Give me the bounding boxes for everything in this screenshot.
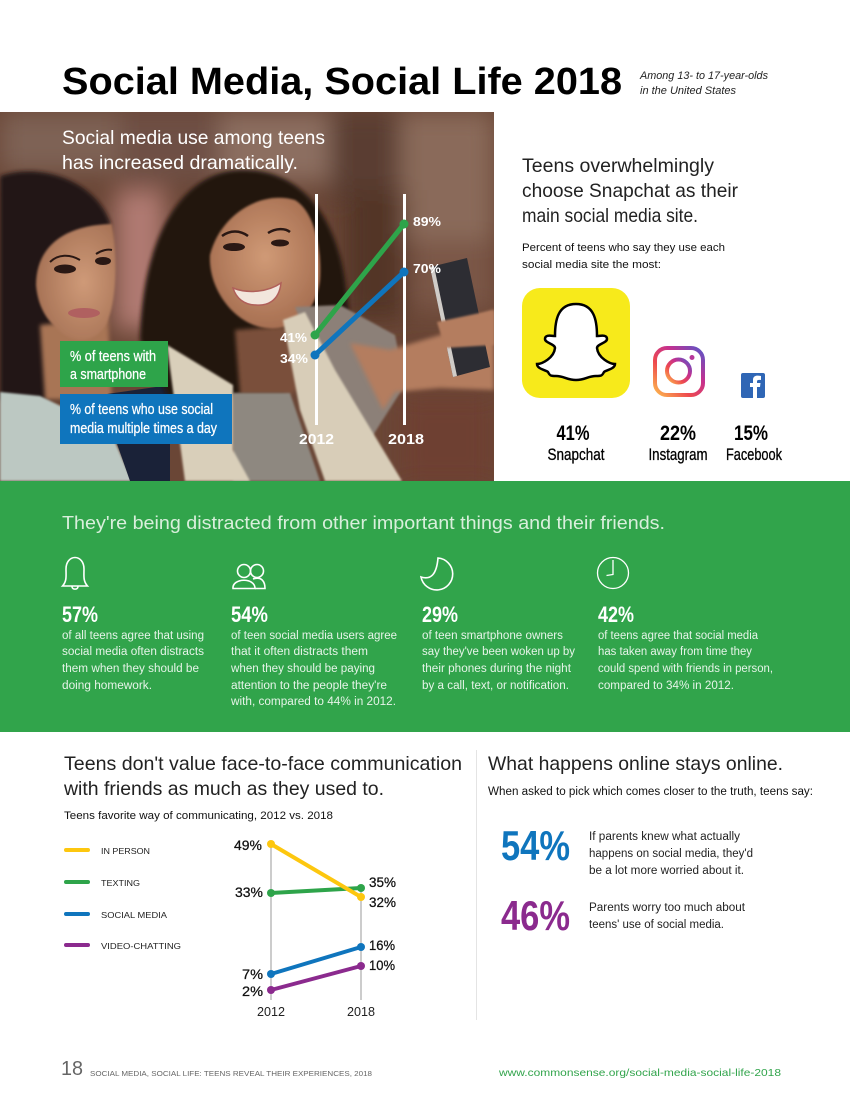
heading: Snapchat: main social media site.	[522, 205, 698, 227]
subtitle: scope of survey: in the United States	[640, 85, 736, 97]
legend: social media multiple times a day: media multiple times a day	[70, 421, 218, 437]
stat: homework	[62, 602, 204, 692]
title: Social Media, Social Life 2018	[62, 61, 622, 103]
heading: face-to-face: Teens don't value face-to-face communication	[64, 753, 462, 775]
legend: smartphone: a smartphone	[70, 367, 146, 383]
legend: video-chatting: VIDEO-CHATTING	[101, 941, 181, 951]
stat: woken up: say they've been woken up by	[422, 646, 575, 658]
stat: woken up: their phones during the night	[422, 663, 572, 675]
stat: Instagram: 22%	[660, 422, 696, 445]
stat: homework: them when they should be	[62, 663, 199, 675]
stat: 54% parents would worry: If parents knew what actually	[589, 831, 740, 843]
stat: attention	[230, 602, 397, 708]
stat: Instagram	[648, 422, 708, 464]
photo heading: Social media use among teens	[62, 127, 325, 149]
stat: 54% parents would worry: 54%	[501, 822, 570, 869]
stat: homework: social media often distracts	[62, 646, 204, 658]
icon: Facebook	[741, 373, 765, 398]
panel: distraction band	[0, 481, 850, 732]
heading: Snapchat: Teens overwhelmingly	[522, 155, 714, 177]
photo heading: has increased dramatically.	[62, 152, 298, 174]
stat: time with friends	[598, 602, 773, 692]
stat: attention: that it often distracts them	[231, 646, 368, 658]
footer: page number and title: 18	[61, 1058, 83, 1080]
stat: 46% parents worry too much	[501, 892, 746, 939]
slope chart: favorite communication: 7%	[242, 967, 263, 982]
chart: smartphone and social media use 2012 vs 2018: 70%	[413, 262, 441, 276]
icon: moon	[421, 558, 453, 590]
slope chart: favorite communication: 35%	[369, 875, 396, 890]
note: percent of teens: Percent of teens who say they use each	[522, 242, 725, 254]
chart: smartphone and social media use 2012 vs 2018: 2018	[388, 431, 424, 448]
icon: Snapchat	[522, 288, 630, 398]
icon: clock	[598, 558, 628, 588]
stat: attention: when they should be paying	[230, 663, 375, 675]
legend: social media multiple times a day	[60, 394, 232, 444]
icon: Instagram	[655, 348, 703, 395]
slope chart: favorite communication: 2%	[242, 984, 263, 999]
footer: url: www.commonsense.org/social-media-social-life-2018	[498, 1067, 781, 1079]
legend: social media multiple times a day: % of teens who use social	[70, 402, 213, 418]
stat: Snapchat: 41%	[556, 422, 590, 445]
heading: Snapchat	[522, 155, 738, 227]
photo heading	[62, 127, 325, 174]
band heading: They're being distracted from other important things and their friends.	[62, 512, 665, 533]
right girl	[140, 170, 494, 481]
chart subtitle: Teens favorite way of communicating, 2012 vs. 2018	[64, 810, 333, 822]
stats: site shares	[548, 422, 782, 464]
chart: smartphone and social media use 2012 vs 2018: 2012	[299, 431, 334, 448]
stat: woken up: by a call, text, or notification.	[422, 680, 569, 692]
stat: time with friends: of teens agree that social media	[598, 630, 759, 642]
slope chart: favorite communication: 16%	[369, 938, 395, 953]
slope chart: favorite communication	[234, 838, 396, 1019]
stat: homework: of all teens agree that using	[62, 630, 204, 642]
stat: 46% parents worry too much: Parents worry too much about	[589, 902, 746, 914]
stat: attention: of teen social media users agree	[231, 630, 397, 642]
stat: Facebook	[726, 422, 782, 464]
panel: teen selfie photo with chart	[0, 112, 494, 485]
slope chart: favorite communication: 10%	[369, 958, 395, 973]
stat: attention: attention to the people they're	[231, 680, 387, 692]
heading: face-to-face: with friends as much as they used to.	[63, 778, 384, 800]
chart: smartphone and social media use 2012 vs 2018	[280, 194, 441, 448]
stat: 46% parents worry too much: teens' use of social media.	[589, 919, 724, 931]
stat: attention: 54%	[231, 602, 268, 627]
legend: smartphone	[60, 341, 168, 387]
footer: page number and title: SOCIAL MEDIA, SOCIAL LIFE: TEENS REVEAL THEIR EXPERIENCES, 2018	[90, 1069, 372, 1078]
note: percent of teens: social media site the most:	[522, 259, 661, 271]
stat: 46% parents worry too much: 46%	[501, 892, 570, 939]
heading: what happens online: What happens online stays online.	[488, 753, 783, 775]
legend: smartphone: % of teens with	[70, 349, 156, 365]
stat: time with friends: compared to 34% in 2012.	[598, 680, 734, 692]
heading: Snapchat: choose Snapchat as their	[522, 180, 738, 202]
stat: Snapchat: Snapchat	[548, 445, 605, 464]
stat: 54% parents would worry: be a lot more worried about it.	[589, 865, 744, 877]
icon: friends	[233, 564, 265, 588]
stat: 54% parents would worry	[501, 822, 753, 877]
chart: smartphone and social media use 2012 vs 2018: 89%	[413, 215, 441, 229]
subtitle: scope of survey	[639, 70, 768, 97]
stat: woken up	[422, 602, 575, 692]
stat: woken up: of teen smartphone owners	[422, 630, 563, 642]
chart legend	[66, 846, 181, 951]
stat: Facebook: Facebook	[726, 445, 782, 464]
stat: 54% parents would worry: happens on social media, they'd	[589, 848, 753, 860]
left girl	[0, 171, 170, 481]
legend: social media: SOCIAL MEDIA	[101, 910, 167, 920]
chart: smartphone and social media use 2012 vs 2018: 41%	[280, 331, 307, 345]
footer: page number and title	[61, 1058, 372, 1080]
divider	[476, 750, 478, 1020]
slope chart: favorite communication: 49%	[234, 838, 262, 853]
icon: bell	[62, 558, 88, 589]
stat: Facebook: 15%	[734, 422, 768, 445]
intro text: When asked to pick which comes closer to the truth, teens say:	[488, 786, 813, 798]
stat: time with friends: could spend with friends in person,	[598, 663, 773, 675]
stat: Snapchat	[548, 422, 605, 464]
subtitle: scope of survey: Among 13- to 17-year-olds	[639, 70, 768, 82]
slope chart: favorite communication: 33%	[235, 885, 263, 900]
slope chart: favorite communication: 2018	[347, 1005, 375, 1019]
stat: attention: with, compared to 44% in 2012.	[230, 696, 396, 708]
note: percent of teens	[522, 242, 725, 271]
stat: woken up: 29%	[422, 602, 458, 627]
stat: time with friends: 42%	[598, 602, 634, 627]
stat: Instagram: Instagram	[648, 445, 708, 464]
heading: face-to-face	[63, 753, 462, 800]
stat: time with friends: has taken away from time they	[598, 646, 752, 658]
stat: homework: doing homework.	[62, 680, 152, 692]
chart: smartphone and social media use 2012 vs 2018: 34%	[280, 352, 308, 366]
legend: in person: IN PERSON	[101, 846, 150, 856]
slope chart: favorite communication: 32%	[369, 895, 396, 910]
legend: texting: TEXTING	[101, 878, 140, 888]
slope chart: favorite communication: 2012	[257, 1005, 285, 1019]
stat: homework: 57%	[62, 602, 98, 627]
